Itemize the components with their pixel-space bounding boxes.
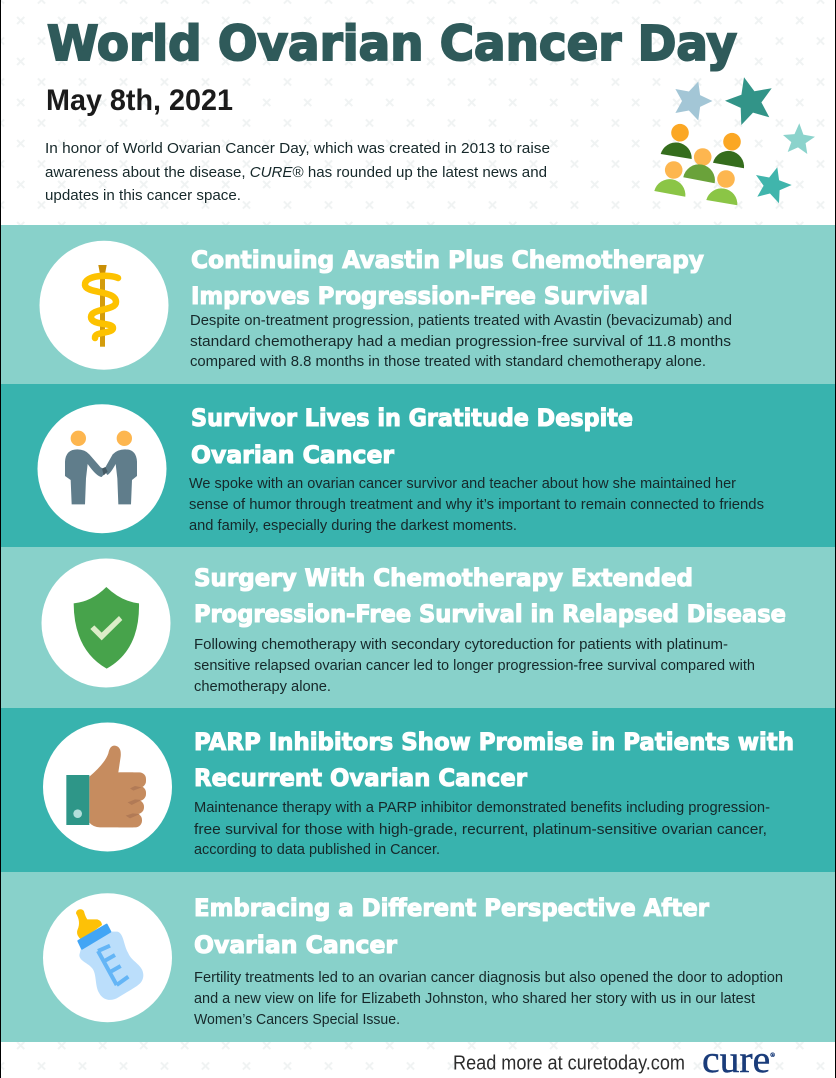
- panel: different perspective: [0, 872, 836, 1042]
- body text: and a new view on life for Elizabeth Johnston, who shared her story with us in our latest: [194, 990, 756, 1007]
- icon: handshake: [38, 404, 166, 533]
- icon: caduceus: [40, 241, 168, 370]
- intro text: [45, 140, 550, 204]
- body text: Fertility treatments led to an ovarian cancer diagnosis but also opened the door to adoption: [194, 969, 783, 986]
- heading: [194, 728, 794, 792]
- icon: baby bottle: [43, 893, 172, 1022]
- intro text: updates in this cancer space.: [45, 187, 241, 204]
- footer: [453, 1039, 775, 1078]
- body text: [194, 969, 783, 1028]
- logo: cure: ®: [770, 1052, 775, 1059]
- heading: Ovarian Cancer: [191, 441, 394, 469]
- body text: compared with 8.8 months in those treated with standard chemotherapy alone.: [190, 353, 706, 370]
- body text: [194, 636, 755, 695]
- heading: Recurrent Ovarian Cancer: [194, 764, 527, 792]
- body text: Women’s Cancers Special Issue.: [194, 1011, 400, 1028]
- heading: PARP Inhibitors Show Promise in Patients with: [194, 728, 794, 756]
- body text: [189, 475, 764, 534]
- heading: Continuing Avastin Plus Chemotherapy: [191, 246, 704, 274]
- heading: Improves Progression-Free Survival: [191, 282, 648, 310]
- icon: shield with check: [42, 558, 170, 688]
- heading: [194, 564, 786, 628]
- heading: Surgery With Chemotherapy Extended: [194, 564, 693, 592]
- title: World Ovarian Cancer Day: [47, 16, 737, 72]
- icon: thumbs up: [43, 722, 172, 852]
- body text: [190, 312, 732, 370]
- intro text: In honor of World Ovarian Cancer Day, which was created in 2013 to raise: [45, 140, 550, 157]
- body text: standard chemotherapy had a median progression-free survival of 11.8 months: [190, 333, 731, 350]
- heading: [191, 246, 704, 310]
- body text: and family, especially during the darkest moments.: [189, 517, 517, 534]
- header: [45, 16, 815, 205]
- body text: sense of humor through treatment and why it’s important to remain connected to friends: [189, 496, 764, 513]
- body text: according to data published in Cancer.: [194, 841, 440, 858]
- panel: surgery: [0, 547, 836, 708]
- icon: stars and community group: [654, 77, 815, 205]
- body text: [194, 799, 770, 858]
- date: May 8th, 2021: [46, 84, 233, 117]
- body text: We spoke with an ovarian cancer survivor and teacher about how she maintained her: [189, 475, 736, 492]
- panel: PARP inhibitors: [0, 708, 836, 872]
- heading: Survivor Lives in Gratitude Despite: [191, 404, 633, 432]
- body text: Maintenance therapy with a PARP inhibitor demonstrated benefits including progression-: [194, 799, 770, 816]
- heading: [191, 404, 633, 469]
- heading: Embracing a Different Perspective After: [194, 894, 709, 922]
- heading: [194, 894, 709, 959]
- intro text: awareness about the disease, CURE® has rounded up the latest news and: [45, 164, 547, 181]
- panel: survivor: [0, 384, 836, 547]
- heading: Ovarian Cancer: [194, 931, 397, 959]
- panel: Avastin: [0, 225, 836, 384]
- body text: Despite on-treatment progression, patients treated with Avastin (bevacizumab) and: [190, 312, 732, 329]
- read more link text: Read more at curetoday.com: [453, 1052, 685, 1074]
- body text: free survival for those with high-grade, recurrent, platinum-sensitive ovarian cancer,: [194, 821, 767, 838]
- body text: Following chemotherapy with secondary cytoreduction for patients with platinum-: [194, 636, 728, 653]
- body text: chemotherapy alone.: [194, 678, 331, 695]
- body text: sensitive relapsed ovarian cancer led to longer progression-free survival compared with: [194, 657, 755, 674]
- heading: Progression-Free Survival in Relapsed Disease: [194, 600, 786, 628]
